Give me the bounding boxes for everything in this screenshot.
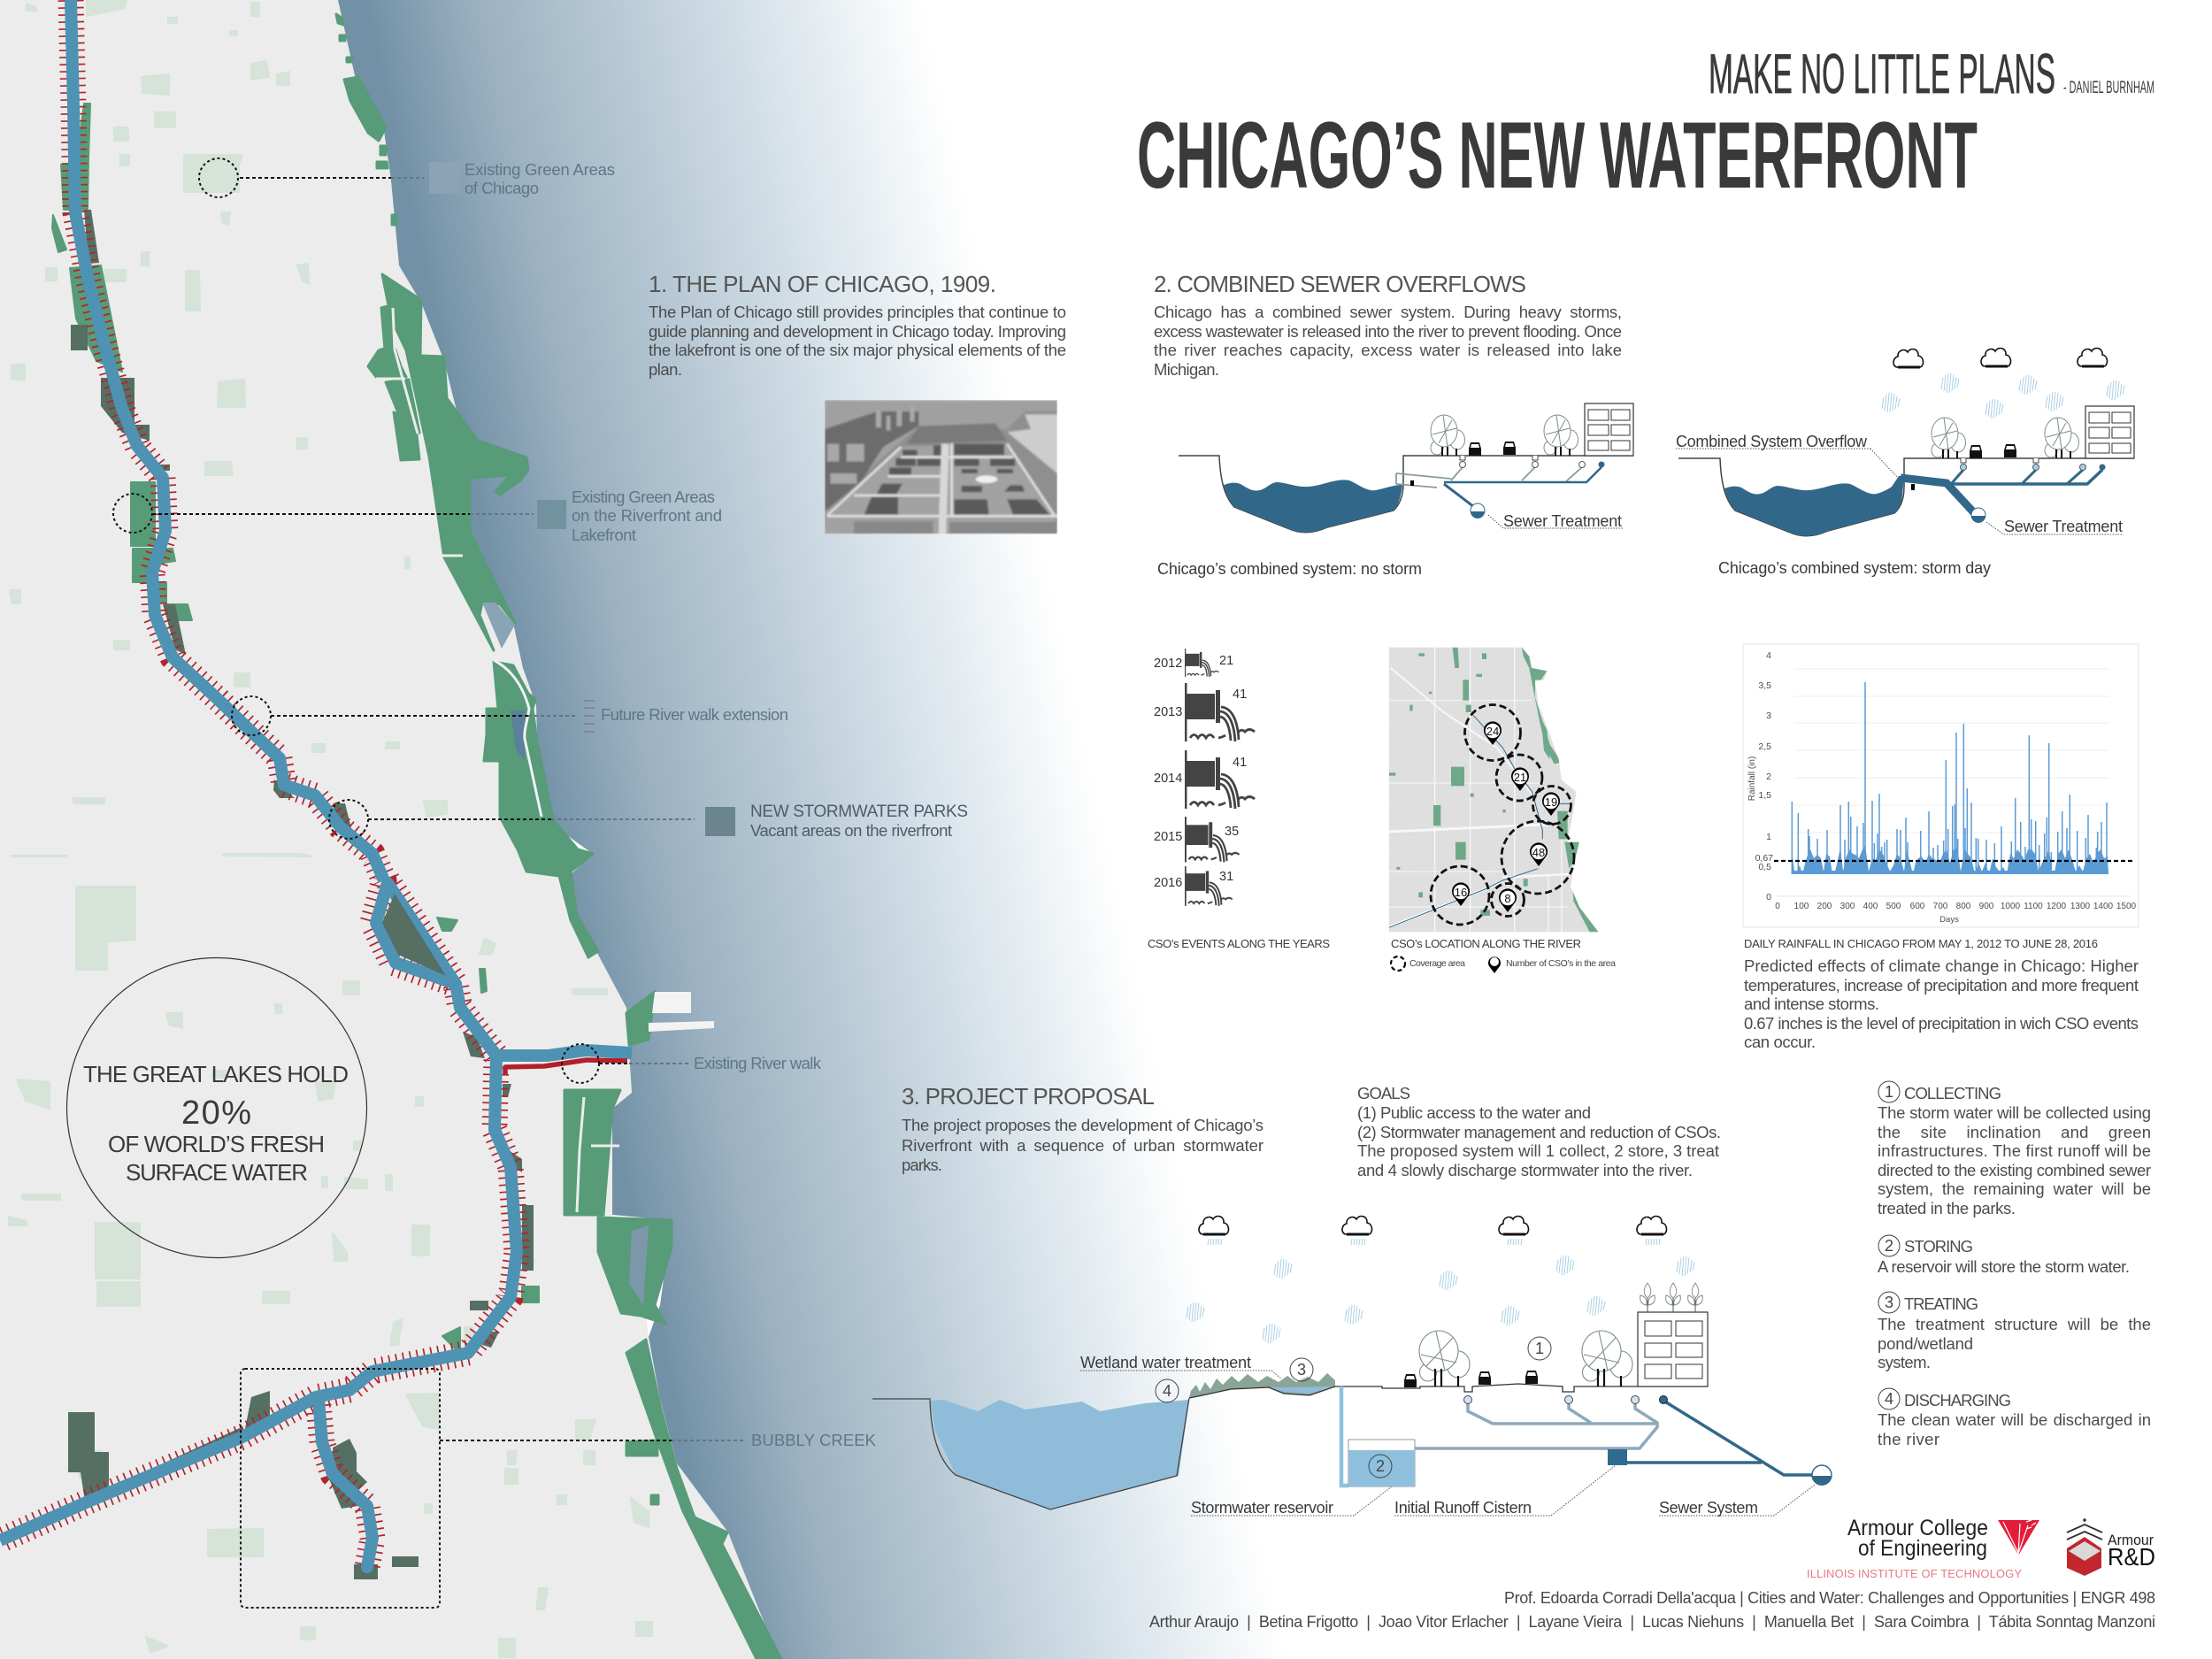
pictogram chart: CSO events along the years: 31: [1219, 870, 1233, 884]
pictogram chart: CSO events along the years: CSO’s EVENTS ALONG THE YEARS: [1148, 937, 1330, 950]
diagram: proposed stormwater section: [872, 1217, 1832, 1517]
steps: collecting, storing, treating, discharging: pond/wetland: [1878, 1334, 1973, 1353]
steps: collecting, storing, treating, discharging: A reservoir will store the storm water.: [1878, 1257, 2130, 1276]
callout: existing green areas of Chicago: [199, 158, 615, 197]
logo: Armour R&D: Armour: [2108, 1532, 2154, 1548]
map: CSO locations along the river: Coverage area: [1409, 958, 1465, 969]
pictogram chart: CSO events along the years: 41: [1233, 687, 1247, 702]
steps: collecting, storing, treating, discharging: 4: [1885, 1390, 1893, 1408]
diagram: combined system, no storm: Chicago’s combined system: no storm: [1157, 560, 1422, 578]
bar chart: daily rainfall in Chicago: 1500: [2116, 902, 2137, 911]
section 1: the Plan of Chicago: The Plan of Chicago still provides principles that continue to: [649, 303, 1066, 321]
pictogram chart: CSO events along the years: 41: [1233, 756, 1247, 770]
steps: collecting, storing, treating, discharging: 1: [1885, 1083, 1893, 1101]
rainfall caption and text: DAILY RAINFALL IN CHICAGO FROM MAY 1, 2012 TO JUNE 28, 2016: [1744, 937, 2098, 950]
rainfall caption and text: 0.67 inches is the level of precipitation in wich CSO events: [1744, 1014, 2139, 1033]
diagram labels: Stormwater reservoir: [1191, 1499, 1333, 1517]
callout: future river walk extension: [232, 696, 788, 735]
callout: existing green areas of Chicago: Existing Green Areas: [465, 160, 615, 179]
logo: Armour College of Engineering: of Engineering: [1858, 1536, 1987, 1561]
bar chart: daily rainfall in Chicago: 900: [1979, 902, 1994, 911]
map: CSO locations along the river: 16: [1455, 886, 1467, 899]
circle callout: the Great Lakes hold 20%: SURFACE WATER: [126, 1159, 308, 1186]
section 2: combined sewer overflows: 2. COMBINED SEWER OVERFLOWS: [1154, 271, 1526, 297]
pictogram chart: CSO events along the years: 21: [1219, 654, 1233, 668]
historic aerial image of the Plan of Chicago: [825, 400, 1057, 534]
bar chart: daily rainfall in Chicago: 3: [1766, 710, 1771, 721]
map: CSO locations along the river: 21: [1514, 771, 1526, 784]
pictogram chart: CSO events along the years: [1148, 649, 1330, 950]
map: CSO locations along the river: [1387, 646, 1616, 973]
pictogram chart: CSO events along the years: 35: [1225, 825, 1239, 839]
section 1: the Plan of Chicago: [649, 271, 1066, 379]
bar chart: daily rainfall in Chicago: 300: [1840, 902, 1855, 911]
diagram: combined system, storm day: Sewer Treatment: [2004, 518, 2123, 535]
steps: collecting, storing, treating, discharging: treated in the parks.: [1878, 1199, 2016, 1217]
map: lakefront parks: [336, 14, 781, 1659]
numbered markers: 4: [1163, 1382, 1171, 1400]
steps: collecting, storing, treating, discharging: system, the remaining water will be: [1878, 1179, 2151, 1198]
bar chart: daily rainfall in Chicago: Days: [1939, 915, 1959, 925]
section 3: project proposal: The project proposes the development of Chicago’s: [902, 1116, 1263, 1134]
bar chart: daily rainfall in Chicago: 600: [1910, 902, 1925, 911]
bar chart: daily rainfall in Chicago: 800: [1956, 902, 1971, 911]
bar chart: daily rainfall in Chicago: 3,5: [1758, 680, 1771, 691]
pictogram chart: CSO events along the years: 2014: [1154, 772, 1182, 786]
callout: Bubbly Creek: BUBBLY CREEK: [751, 1431, 877, 1449]
pictogram chart: CSO events along the years: 2016: [1154, 876, 1182, 890]
rainfall caption and text: and intense storms.: [1744, 995, 1879, 1013]
logo: Armour College of Engineering: [1807, 1516, 2039, 1580]
pictogram chart: CSO events along the years: 2013: [1154, 705, 1182, 719]
steps: collecting, storing, treating, discharging: the site inclination and green: [1878, 1123, 2151, 1141]
callout: future river walk extension: Future River walk extension: [601, 705, 788, 724]
section 1: the Plan of Chicago: 1. THE PLAN OF CHICAGO, 1909.: [649, 271, 996, 297]
sewer system ball: [1812, 1465, 1832, 1486]
section 2: combined sewer overflows: [1154, 271, 1622, 379]
circle callout: the Great Lakes hold 20%: THE GREAT LAKES HOLD: [83, 1061, 349, 1087]
steps: collecting, storing, treating, discharging: infrastructures. The first runoff will be: [1878, 1141, 2151, 1160]
circle callout: the Great Lakes hold 20%: [67, 957, 366, 1258]
goals text: [1357, 1084, 1721, 1179]
goals text: and 4 slowly discharge stormwater into the river.: [1357, 1161, 1693, 1179]
diagram labels: Wetland water treatment: [1080, 1354, 1251, 1371]
callout: new stormwater parks: Vacant areas on the riverfront: [750, 821, 952, 840]
title block: [1137, 43, 2154, 208]
stormwater reservoir: [1348, 1440, 1415, 1486]
bar chart: daily rainfall in Chicago: [1743, 644, 2139, 927]
section 1: the Plan of Chicago: the lakefront is one of the six major physical elements of the: [649, 341, 1066, 359]
section 2: combined sewer overflows: Michigan.: [1154, 360, 1219, 379]
map: CSO locations along the river: 8: [1504, 892, 1511, 905]
callout: existing river walk: Existing River walk: [694, 1054, 822, 1072]
logo: Armour College of Engineering: ILLINOIS INSTITUTE OF TECHNOLOGY: [1807, 1567, 2022, 1580]
diagram: combined system, storm day: Chicago’s combined system: storm day: [1718, 559, 1991, 577]
steps: collecting, storing, treating, discharging: The treatment structure will be the: [1878, 1315, 2151, 1333]
callout: new stormwater parks: [329, 800, 968, 840]
section 2: combined sewer overflows: the river reaches capacity, excess water is released into lake: [1154, 341, 1622, 359]
map: Chicago river with riverwalk ticks: [0, 0, 632, 1567]
map: CSO locations along the river: 24: [1486, 725, 1499, 738]
section 1: the Plan of Chicago: plan.: [649, 360, 682, 379]
map: CSO locations along the river: CSO’s LOCATION ALONG THE RIVER: [1391, 937, 1581, 950]
bar chart: daily rainfall in Chicago: 0: [1775, 902, 1780, 911]
steps: collecting, storing, treating, discharging: 2: [1885, 1237, 1893, 1255]
section 3: project proposal: parks.: [902, 1156, 942, 1174]
goals text: (1) Public access to the water and: [1357, 1103, 1591, 1122]
callout: existing green areas on the riverfront and lakefront: on the Riverfront and: [572, 506, 722, 525]
green-roof building: [1638, 1283, 1708, 1386]
goals text: GOALS: [1357, 1084, 1410, 1102]
bar chart: daily rainfall in Chicago: 1000: [2001, 902, 2021, 911]
steps: collecting, storing, treating, discharging: STORING: [1904, 1237, 1973, 1256]
goals text: (2) Stormwater management and reduction of CSOs.: [1357, 1123, 1721, 1141]
map: green areas on the riverfront: [52, 104, 539, 1354]
pictogram chart: CSO events along the years: 2015: [1154, 830, 1182, 844]
collection pipes: [1341, 1386, 1815, 1486]
numbered markers: 1: [1535, 1340, 1544, 1357]
bar chart: daily rainfall in Chicago: 1,5: [1758, 790, 1771, 801]
bar chart: daily rainfall in Chicago: 0,67: [1755, 853, 1773, 864]
steps: collecting, storing, treating, discharging: [1878, 1081, 2151, 1448]
map: CSO locations along the river: Number of CSO’s in the area: [1506, 958, 1616, 969]
bar chart: daily rainfall in Chicago: 700: [1933, 902, 1948, 911]
rainfall caption and text: [1744, 937, 2139, 1051]
steps: collecting, storing, treating, discharging: the river: [1878, 1430, 1939, 1448]
steps: collecting, storing, treating, discharging: DISCHARGING: [1904, 1391, 2011, 1409]
callout: Bubbly Creek: [241, 1369, 877, 1608]
bar chart: daily rainfall in Chicago: 2: [1766, 772, 1771, 782]
circle callout: the Great Lakes hold 20%: OF WORLD’S FRESH: [108, 1131, 325, 1157]
credits: [1149, 1589, 2155, 1631]
callout: existing green areas on the riverfront and lakefront: [113, 488, 722, 544]
initial runoff cistern: [1608, 1449, 1627, 1465]
bar chart: daily rainfall in Chicago: 200: [1817, 902, 1832, 911]
bar chart: daily rainfall in Chicago: 2,5: [1758, 741, 1771, 752]
bar chart: daily rainfall in Chicago: 100: [1794, 902, 1809, 911]
section 2: combined sewer overflows: Chicago has a combined sewer system. During heavy storms,: [1154, 303, 1622, 321]
logo: Armour R&D: R&D: [2108, 1543, 2155, 1571]
river basin: [872, 1398, 1189, 1509]
credits: Prof. Edoarda Corradi Della'acqua | Cities and Water: Challenges and Opportunities | ENGR 498: [1504, 1589, 2155, 1607]
bar chart: daily rainfall in Chicago: 1100: [2024, 902, 2043, 911]
bar chart: daily rainfall in Chicago: 0: [1766, 892, 1771, 902]
rainfall caption and text: temperatures, increase of precipitation and more frequent: [1744, 976, 2139, 995]
bar chart: daily rainfall in Chicago: 1: [1766, 832, 1771, 842]
diagram labels: [1080, 1354, 1815, 1517]
bar chart: daily rainfall in Chicago: 500: [1886, 902, 1901, 911]
callout: existing green areas on the riverfront and lakefront: Existing Green Areas: [572, 488, 715, 506]
diagram labels: Sewer System: [1659, 1499, 1758, 1517]
steps: collecting, storing, treating, discharging: system.: [1878, 1353, 1931, 1371]
callout: new stormwater parks: NEW STORMWATER PARKS: [750, 803, 968, 821]
bar chart: daily rainfall in Chicago: 1200: [2047, 902, 2067, 911]
goals text: The proposed system will 1 collect, 2 store, 3 treat: [1357, 1141, 1719, 1160]
map: CSO locations along the river: 48: [1532, 846, 1545, 859]
steps: collecting, storing, treating, discharging: COLLECTING: [1904, 1084, 2001, 1102]
callout: existing river walk: [562, 1044, 822, 1083]
map: new stormwater parks, vacant parcels on the riverfront: [68, 210, 534, 1579]
steps: collecting, storing, treating, discharging: The clean water will be discharged in: [1878, 1410, 2151, 1429]
map background: land: [0, 0, 784, 1659]
section 1: the Plan of Chicago: guide planning and development in Chicago today. Improving: [649, 322, 1066, 341]
numbered markers: 2: [1376, 1457, 1385, 1475]
steps: collecting, storing, treating, discharging: directed to the existing combined sewer: [1878, 1161, 2151, 1179]
steps: collecting, storing, treating, discharging: The storm water will be collected using: [1878, 1103, 2151, 1122]
callout: existing green areas on the riverfront and lakefront: Lakefront: [572, 526, 636, 544]
numbered markers: [1156, 1337, 1551, 1478]
diagram: combined system, storm day: Combined System Overflow: [1676, 433, 1868, 450]
map: existing green areas of Chicago (light): [9, 0, 652, 1657]
diagram: combined system, no storm: [1157, 403, 1633, 578]
callout: existing green areas of Chicago: of Chicago: [465, 179, 539, 197]
wetland water treatment: [1189, 1373, 1335, 1398]
pictogram chart: CSO events along the years: 2012: [1154, 657, 1182, 671]
logo: Armour R&D: [2067, 1518, 2155, 1576]
bar chart: daily rainfall in Chicago: 1300: [2070, 902, 2091, 911]
bar chart: daily rainfall in Chicago: 400: [1863, 902, 1878, 911]
logo: Armour College of Engineering: Armour College: [1847, 1516, 1988, 1540]
diagram: combined system, no storm: Sewer Treatment: [1503, 512, 1622, 530]
clouds and rain: [1187, 1217, 1694, 1343]
bar chart: daily rainfall in Chicago: 4: [1766, 650, 1771, 661]
numbered markers: 3: [1297, 1361, 1306, 1379]
diagram labels: Initial Runoff Cistern: [1394, 1499, 1532, 1517]
section 3: project proposal: Riverfront with a sequence of urban stormwater: [902, 1136, 1263, 1155]
section 2: combined sewer overflows: excess wastewater is released into the river to prevent flooding. Once: [1154, 322, 1622, 341]
rainfall caption and text: Predicted effects of climate change in Chicago: Higher: [1744, 956, 2139, 975]
circle callout: the Great Lakes hold 20%: 20%: [181, 1094, 251, 1132]
map: CSO locations along the river: 19: [1545, 795, 1557, 809]
credits: Arthur Araujo | Betina Frigotto | Joao Vitor Erlacher | Layane Vieira | Lucas Niehuns | Manuella Bet | Sara Coimbra | Tábita Sonntag Manzoni: [1149, 1613, 2155, 1631]
bar chart: daily rainfall in Chicago: Rainfall (in): [1747, 757, 1757, 801]
section 3: project proposal: 3. PROJECT PROPOSAL: [902, 1083, 1155, 1110]
steps: collecting, storing, treating, discharging: 3: [1885, 1294, 1893, 1311]
map background: Lake Michigan gradient: [338, 0, 1327, 1659]
steps: collecting, storing, treating, discharging: TREATING: [1904, 1294, 1978, 1313]
bar chart: daily rainfall in Chicago: 0,5: [1758, 862, 1771, 872]
street, trees and cars: [1335, 1331, 1708, 1392]
section 3: project proposal: [902, 1083, 1263, 1174]
rainfall caption and text: can occur.: [1744, 1033, 1816, 1051]
diagram: combined system, storm day: [1676, 349, 2134, 577]
bar chart: daily rainfall in Chicago: 1400: [2093, 902, 2114, 911]
